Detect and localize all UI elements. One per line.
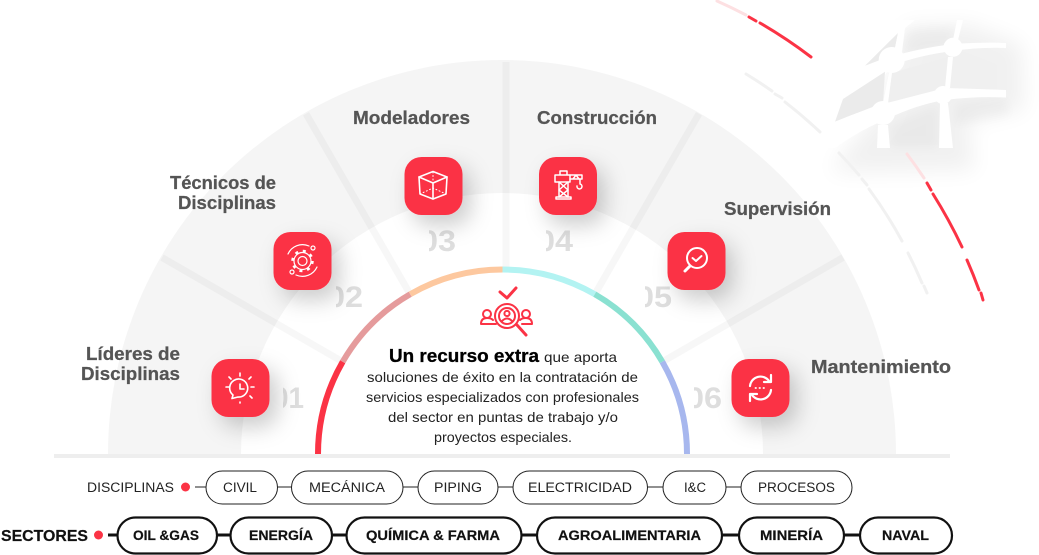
central description text: servicios especializados con profesionales [366,389,639,405]
step 03: Modeladores [353,108,470,258]
pill: energía [230,518,332,554]
step 06: Mantenimiento [686,357,951,417]
pill: naval [860,518,952,554]
pill: procesos [741,471,852,504]
central description text: proyectos especiales. [434,429,572,445]
step 02: Técnicos de Disciplinas: 02 [327,281,363,314]
pill: piping [418,471,498,504]
decorative outer arc: grey [746,74,927,293]
central description text: que aporta [544,349,617,365]
step 01: Líderes de Disciplinas: Líderes de [86,344,180,364]
central half circle with coloured arc [318,270,687,454]
sectores row: SECTORES [1,528,88,545]
pill: naval: NAVAL [882,528,929,543]
pill: oil & gas [118,518,217,554]
disciplinas row: DISCIPLINAS [87,480,174,495]
pill: química & farma [346,518,522,554]
pill: procesos: PROCESOS [758,480,835,495]
pill: i&c: I&C [684,480,706,495]
step 01: Líderes de Disciplinas: 01 [273,382,304,415]
step 05: Supervisión: 05 [636,281,672,314]
pill: minería [739,518,844,554]
step 03: Modeladores: 03 [420,225,456,258]
pill: química & farma: QUÍMICA & FARMA [366,528,500,543]
step 03: Modeladores: Modeladores [353,108,470,128]
step 01: Líderes de Disciplinas [81,344,304,417]
step 02: Técnicos de Disciplinas: Técnicos de [170,173,276,193]
step 06: Mantenimiento: 06 [686,382,722,415]
central description text: del sector en puntas de trabajo y/o [388,409,618,425]
step 02: Técnicos de Disciplinas: Disciplinas [178,193,276,213]
pill: civil [206,471,278,504]
sectores row [1,518,952,554]
logo mark [820,20,1024,172]
pill: oil & gas: OIL &GAS [133,528,199,543]
pill: agroalimentaria: AGROALIMENTARIA [558,528,701,543]
central description text: Un recurso extra [389,346,540,366]
pill: piping: PIPING [434,480,482,495]
pill: mecánica [292,471,403,504]
step 06: Mantenimiento: Mantenimiento [811,357,951,377]
pill: electricidad [513,471,648,504]
semicircle background panel [54,60,950,458]
step 02: Técnicos de Disciplinas [170,173,363,314]
pill: energía: ENERGÍA [249,528,313,543]
icon: people search with check [481,288,532,335]
pill: electricidad: ELECTRICIDAD [528,480,632,495]
pill: minería: MINERÍA [760,528,823,543]
central description text [366,346,639,445]
decorative outer arc: red [717,1,983,300]
step 04: Construcción [537,108,657,258]
pill: i&c [663,471,726,504]
pill: civil: CIVIL [223,480,257,495]
step 05: Supervisión: Supervisión [724,199,831,219]
step 01: Líderes de Disciplinas: Disciplinas [81,364,180,384]
pill: mecánica: MECÁNICA [309,480,385,495]
step 04: Construcción: Construcción [537,108,657,128]
pill: agroalimentaria [537,518,722,554]
central description text: soluciones de éxito en la contratación de [367,369,638,385]
step 05: Supervisión [645,201,830,310]
disciplinas row [87,471,852,504]
step 04: Construcción: 04 [537,225,573,258]
